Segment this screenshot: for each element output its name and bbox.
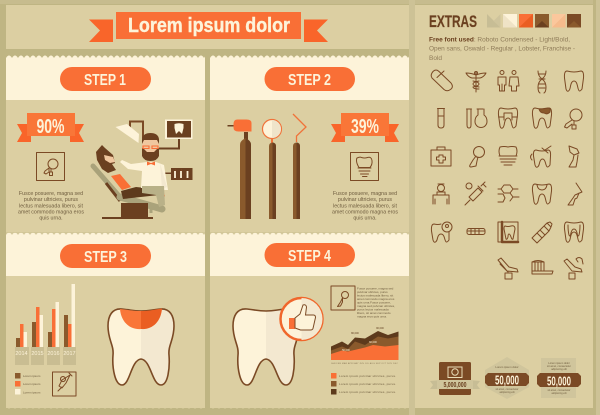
step 4 body text: libero, sit amet commodo bbox=[357, 311, 391, 315]
step 2 body text: quis urna. bbox=[353, 216, 377, 222]
colour swatches bbox=[487, 14, 581, 28]
icon: tooth bbox=[564, 71, 584, 91]
step 4 body text: lectus malesuada libero, sit bbox=[357, 294, 393, 298]
area chart: 60,000 bbox=[369, 341, 377, 344]
bar chart: 2014 bbox=[15, 351, 28, 357]
step 4 pill: STEP 4 bbox=[288, 248, 331, 265]
badge: square 50,000: adipiscing elit bbox=[551, 367, 567, 371]
badge: hexagon 50,000: Lorem ipsum dolor bbox=[495, 365, 519, 369]
icon: pill bbox=[431, 70, 452, 91]
icon: dental tools bbox=[564, 109, 582, 129]
badge: hexagon 50,000 bbox=[485, 357, 529, 399]
step 2 body text bbox=[332, 191, 398, 222]
title ribbon left tail bbox=[89, 20, 113, 42]
badge: camera 5,000,000: 5,000,000 bbox=[444, 382, 467, 389]
badge: camera 5,000,000 bbox=[430, 362, 480, 395]
badge: square 50,000 bbox=[537, 358, 581, 398]
illustration: dentist and patient bbox=[93, 120, 192, 219]
icon: implant bbox=[499, 146, 517, 165]
step 3 pill: STEP 3 bbox=[84, 249, 127, 266]
badge: square 50,000: 50,000 bbox=[547, 374, 571, 388]
badge: hexagon 50,000: adipiscing elit bbox=[499, 391, 515, 394]
bar chart: 2017 bbox=[63, 351, 76, 357]
area chart legend: Lorem ipsum pulvinar ultricies, purus. bbox=[339, 390, 396, 394]
panel: step 3 bbox=[6, 231, 205, 409]
step 4 body text: purus lectus malesuada bbox=[357, 308, 389, 312]
icon: x-ray bbox=[498, 222, 518, 242]
title ribbon right tail bbox=[304, 20, 328, 42]
bar chart legend: Lorem ipsum bbox=[23, 374, 41, 378]
badge: square 50,000: sit amet, consectetur bbox=[547, 389, 571, 392]
icon: tooth section bbox=[498, 108, 518, 128]
icon: caduceus bbox=[466, 72, 486, 92]
step 4 body text: Fusce posuere, magna sed bbox=[357, 286, 394, 290]
icon: male and female bbox=[498, 70, 519, 91]
icon: magnifier mirror bbox=[470, 146, 484, 167]
icon: dna bbox=[538, 71, 546, 93]
icon: syringe bbox=[465, 182, 486, 205]
step 1 pill bbox=[60, 67, 151, 91]
icon: test tube bbox=[438, 108, 444, 128]
step 4 body text: amet commodo magna eros bbox=[357, 297, 395, 301]
area chart legend: Lorem ipsum pulvinar ultricies, purus. bbox=[339, 374, 396, 378]
panel: extras bbox=[409, 0, 600, 415]
badge: square 50,000: adipiscing elit bbox=[551, 392, 567, 395]
badge: square 50,000: sit amet, consectetur bbox=[547, 364, 571, 368]
badge: square 50,000: Lorem ipsum dolor bbox=[548, 361, 570, 365]
tooth with cavity bbox=[108, 308, 174, 385]
icon: dental tools box bbox=[36, 152, 64, 180]
icon: tooth root bbox=[564, 222, 584, 242]
bar chart: 2016 bbox=[47, 351, 60, 357]
step 2 body text: Fusce posuere, magna sed bbox=[333, 191, 397, 197]
step 4 body text bbox=[357, 286, 395, 318]
39% badge bbox=[331, 113, 399, 142]
step 2 body text: pulvinar ultricies, purus bbox=[338, 197, 392, 203]
area chart: JAN FEB MAR APR MAY JUN JUL AUG SEP OCT NOV DEC bbox=[331, 362, 398, 365]
90% badge bbox=[17, 113, 84, 142]
step 1 body text: Fusce posuere, magna sed bbox=[19, 191, 83, 197]
39% badge: 39% bbox=[351, 116, 379, 138]
icon: molecule bbox=[498, 185, 519, 202]
90% badge: 90% bbox=[36, 116, 65, 138]
area chart legend bbox=[331, 373, 396, 394]
font credits bbox=[429, 36, 575, 62]
icon: toothbrush bbox=[532, 260, 553, 274]
step 2 pill bbox=[264, 67, 355, 91]
step 2 body text: amet commodo magna eros bbox=[332, 210, 398, 216]
title: Lorem ipsum dolor bbox=[128, 15, 290, 37]
step 1 body text: pulvinar ultricies, purus bbox=[24, 197, 78, 203]
bar chart bbox=[15, 284, 76, 365]
healthy tooth bbox=[233, 309, 299, 385]
step 4 body text: magna eros quis urna. bbox=[357, 314, 387, 318]
step 1 body text bbox=[18, 191, 84, 222]
step 2 pill: STEP 2 bbox=[288, 72, 331, 89]
step 1 pill: STEP 1 bbox=[84, 72, 126, 89]
icon: tooth with tool bbox=[530, 146, 551, 167]
step 4 pill bbox=[264, 243, 355, 267]
icon: dentist bbox=[433, 184, 449, 204]
bar chart: 2015 bbox=[31, 351, 44, 357]
step 2 body text: lectus malesuada libero, sit bbox=[333, 204, 397, 210]
dental probe bbox=[293, 114, 306, 219]
panel: step 2 bbox=[210, 55, 409, 233]
bar chart legend: Lorem ipsum bbox=[23, 382, 41, 386]
step 4 body text: quis urna.Fusce posuere, bbox=[357, 300, 391, 304]
icon: tooth with magnifier bbox=[431, 222, 452, 242]
panel: step 1 bbox=[6, 55, 205, 233]
icon: dental chair bbox=[498, 258, 518, 279]
dental handpiece bbox=[228, 120, 252, 219]
area chart: 50,000 bbox=[342, 349, 350, 352]
font credits: Free font used: Roboto Condensed - Light/Bold, bbox=[429, 36, 570, 44]
icon: flask and tube bbox=[466, 109, 487, 128]
icon: decayed tooth bbox=[532, 108, 552, 128]
panel: title band bbox=[6, 5, 409, 49]
area chart: 80,000 bbox=[351, 332, 359, 335]
icon: syringe box bbox=[52, 372, 76, 396]
step 4 body text: pulvinar ultricies, purus bbox=[357, 290, 388, 294]
font credits: Open sans, Oswald - Regular , Lobster, Franchise - bbox=[429, 46, 575, 52]
icon: chair and lamp bbox=[564, 258, 583, 279]
title banner bbox=[116, 12, 301, 39]
icon: toothpaste bbox=[532, 222, 552, 243]
panel: step 4 bbox=[210, 231, 409, 409]
step 1 body text: amet commodo magna eros bbox=[18, 210, 84, 216]
area chart: 90,000 bbox=[376, 327, 384, 330]
icon: first aid kit bbox=[431, 147, 451, 166]
bar chart legend bbox=[15, 373, 41, 394]
area chart legend: Lorem ipsum pulvinar ultricies, purus. bbox=[339, 382, 396, 386]
icon: thumbs up badge bbox=[280, 298, 322, 340]
icon: implant box bbox=[350, 152, 378, 180]
area chart bbox=[331, 327, 398, 365]
icon: handpiece bbox=[569, 146, 579, 167]
step 1 body text: quis urna. bbox=[39, 216, 63, 222]
step 3 pill bbox=[60, 244, 151, 268]
font credits: Bold bbox=[429, 55, 442, 62]
icon: mirror box bbox=[331, 286, 355, 310]
badge: hexagon 50,000: 50,000 bbox=[495, 372, 519, 388]
icon: tooth with crown bbox=[532, 184, 552, 204]
extras heading: EXTRAS bbox=[429, 13, 477, 31]
step 4 body text: magna sed pulvinar ultricies, bbox=[357, 304, 395, 308]
step 1 body text: lectus malesuada libero, sit bbox=[19, 204, 83, 210]
badge: hexagon 50,000: sit amet, consectetur bbox=[495, 388, 519, 391]
icon: probe bbox=[568, 183, 582, 205]
dental mirror bbox=[262, 120, 282, 219]
icon: braces bbox=[467, 228, 485, 234]
bar chart legend: Lorem ipsum bbox=[23, 390, 41, 394]
